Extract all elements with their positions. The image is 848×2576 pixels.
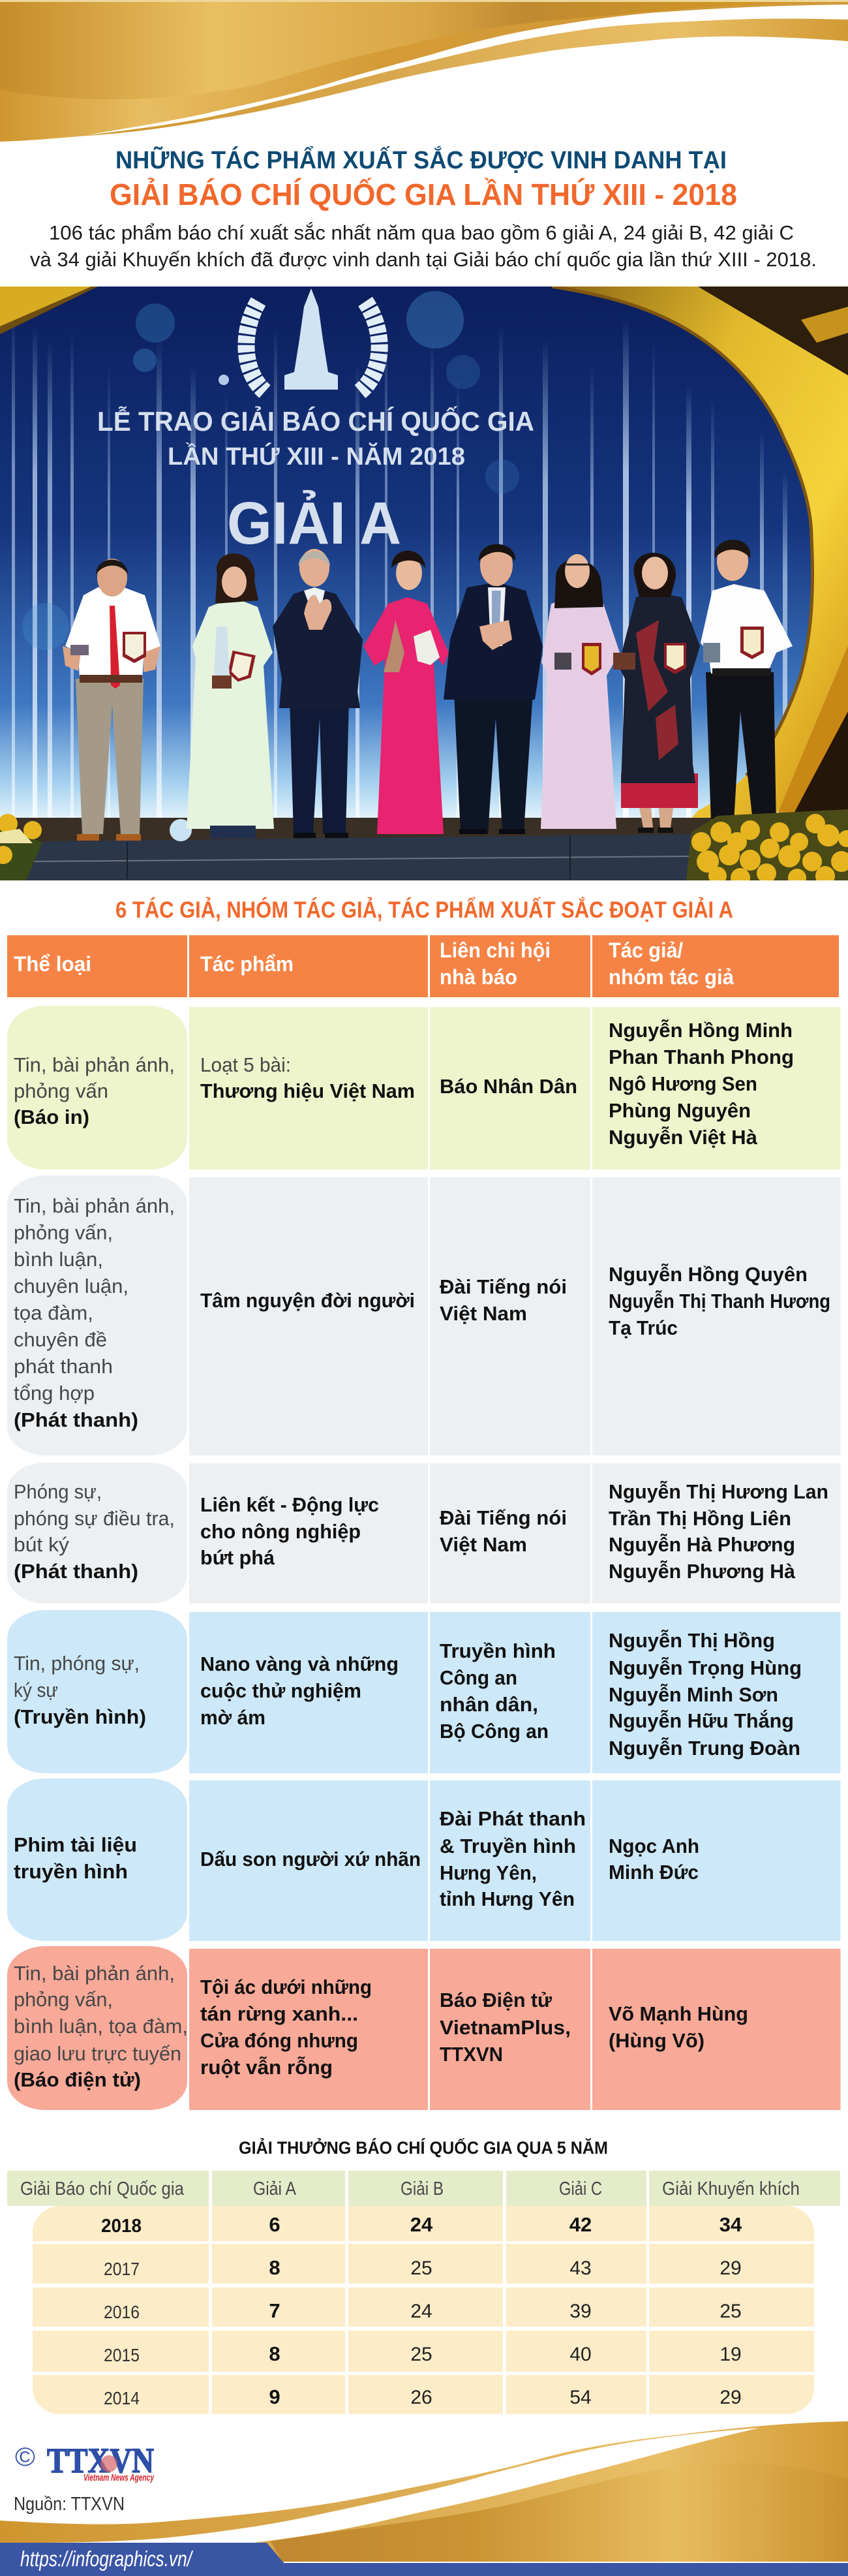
figure: woman in pale green ao dai — [187, 553, 274, 839]
authors: Nguyễn Hồng Quyên — [609, 1263, 808, 1286]
gold ring arch — [0, 287, 848, 842]
row 2017 — [104, 2256, 742, 2279]
authors: Ngô Hương Sen — [609, 1072, 757, 1095]
category pill: phát thanh — [14, 1355, 113, 1378]
figure: man in dark suit, clapping — [273, 549, 363, 838]
row 2016: 39 — [569, 2301, 592, 2322]
category pill: phỏng vấn, — [14, 1221, 113, 1244]
footer blue band with url: https://infographics.vn/ — [20, 2547, 193, 2571]
category pill: (Báo in) — [14, 1106, 89, 1128]
work: Thương hiệu Việt Nam — [200, 1079, 415, 1102]
association: tỉnh Hưng Yên — [440, 1887, 575, 1910]
authors — [592, 1007, 840, 1170]
table header: nhà báo — [440, 965, 517, 989]
work: cuộc thử nghiệm — [200, 1679, 361, 1702]
stats table header: Giải C — [559, 2179, 602, 2199]
work: Tâm nguyện đời người — [200, 1289, 415, 1312]
category pill: (Truyền hình) — [14, 1705, 146, 1728]
panel: row 6 báo điện tử — [7, 1946, 840, 2110]
association: Hưng Yên, — [440, 1861, 537, 1884]
work: Loạt 5 bài: — [200, 1053, 291, 1076]
stage backdrop text: LẦN THỨ XIII - NĂM 2018 — [168, 442, 465, 471]
row 2017: 2017 — [104, 2259, 140, 2279]
table header: Tác giả/ — [609, 939, 683, 962]
category pill: phỏng vấn, — [14, 1988, 113, 2011]
association: VietnamPlus, — [440, 2016, 571, 2039]
authors: Nguyễn Trung Đoàn — [609, 1737, 800, 1760]
work: Dấu son người xứ nhãn — [200, 1848, 421, 1870]
category pill: chuyên luận, — [14, 1275, 129, 1297]
row 2017: 8 — [269, 2256, 280, 2279]
work: Cửa đóng nhưng — [200, 2029, 358, 2052]
row 2015: 8 — [269, 2342, 280, 2365]
row 2014 — [104, 2385, 742, 2408]
category pill: (Phát thanh) — [14, 1560, 138, 1583]
authors: Nguyễn Trọng Hùng — [609, 1656, 802, 1679]
row 2016: 25 — [719, 2301, 742, 2322]
header gold swoosh — [0, 0, 848, 142]
stage backdrop text: GIẢI A — [227, 489, 401, 557]
row 2018: 24 — [410, 2213, 433, 2236]
row 2014: 2014 — [104, 2388, 140, 2408]
panel: row 2 phát thanh — [7, 1175, 840, 1455]
figure: woman in pink ao dai — [363, 551, 449, 834]
authors: Trần Thị Hồng Liên — [609, 1507, 791, 1530]
association — [430, 1463, 590, 1604]
row 2015: 40 — [569, 2344, 592, 2365]
category pill — [7, 1610, 187, 1773]
category pill: tổng hợp — [14, 1382, 95, 1404]
work — [189, 1612, 428, 1773]
figure: woman in light pink ao dai — [541, 554, 620, 829]
title: NHỮNG TÁC PHẨM XUẤT SẮC ĐƯỢC VINH DANH TẠI — [115, 145, 727, 174]
work: ruột vẫn rỗng — [200, 2056, 333, 2079]
table header: Tác phẩm — [200, 952, 294, 976]
row 2016: 7 — [269, 2299, 280, 2322]
work: tán rừng xanh... — [200, 2002, 358, 2025]
work: bứt phá — [200, 1546, 275, 1569]
stage backdrop text — [97, 405, 534, 557]
association — [430, 1612, 590, 1773]
association: Việt Nam — [440, 1533, 527, 1556]
work — [189, 1463, 428, 1604]
authors: Phan Thanh Phong — [609, 1046, 794, 1068]
stats row bands — [33, 2206, 814, 2415]
category pill: Phóng sự, — [14, 1480, 102, 1503]
category pill — [7, 1778, 187, 1941]
figure: young man in white shirt — [701, 540, 793, 828]
association: Đài Tiếng nói — [440, 1275, 567, 1298]
authors: Nguyễn Việt Hà — [609, 1126, 758, 1149]
source: Nguồn: TTXVN — [14, 2494, 125, 2515]
association: Truyền hình — [440, 1639, 556, 1662]
association: & Truyền hình — [440, 1835, 576, 1857]
authors — [592, 1780, 840, 1941]
association — [430, 1177, 590, 1455]
category pill: bình luận, — [14, 1248, 103, 1271]
association: Đài Phát thanh — [440, 1807, 586, 1830]
work — [189, 1007, 428, 1170]
row 2018 — [101, 2213, 742, 2237]
stats heading: GIẢI THƯỞNG BÁO CHÍ QUỐC GIA QUA 5 NĂM — [239, 2137, 608, 2158]
category pill: Tin, bài phản ánh, — [14, 1194, 175, 1217]
row 2014: 29 — [719, 2387, 742, 2408]
stats table header: Giải Báo chí Quốc gia — [20, 2179, 185, 2199]
association: Báo Nhân Dân — [440, 1075, 577, 1098]
row 2015: 19 — [719, 2344, 742, 2365]
work — [189, 1949, 428, 2110]
category pill: Phim tài liệu — [14, 1833, 137, 1856]
flowers — [0, 809, 848, 888]
category pill: giao lưu trực tuyến — [14, 2042, 181, 2065]
category pill: chuyên đề — [14, 1328, 107, 1351]
stats table header: Giải Khuyến khích — [662, 2179, 800, 2199]
authors: Ngọc Anh — [609, 1835, 699, 1857]
row 2018: 42 — [569, 2213, 592, 2236]
title — [110, 145, 737, 211]
row 2016: 2016 — [104, 2302, 140, 2322]
footer logo: TTXVN: Vietnam News Agency — [83, 2472, 154, 2483]
stage floor — [16, 818, 711, 880]
row 2017: 43 — [569, 2258, 592, 2279]
category pill: ký sự — [14, 1679, 58, 1701]
row 2018: 2018 — [101, 2216, 142, 2237]
association: Việt Nam — [440, 1302, 527, 1325]
category pill: Tin, bài phản ánh, — [14, 1053, 175, 1076]
row 2017: 29 — [719, 2258, 742, 2279]
footer blue band with url — [0, 2543, 848, 2576]
figure: man in dark suit — [444, 544, 543, 834]
authors: Võ Mạnh Hùng — [609, 2002, 748, 2025]
panel: row 5 phim tài liệu — [7, 1778, 840, 1941]
work: Nano vàng và những — [200, 1653, 399, 1675]
photo: award ceremony stage — [0, 287, 848, 888]
category pill — [7, 1946, 188, 2110]
category pill: Tin, bài phản ánh, — [14, 1962, 175, 1985]
work: Liên kết - Động lực — [200, 1493, 379, 1516]
stats table header: Giải A — [253, 2179, 297, 2199]
authors: Minh Đức — [609, 1861, 699, 1884]
association: TTXVN — [440, 2043, 503, 2066]
table header — [7, 935, 839, 997]
row 2016 — [104, 2299, 742, 2322]
figure: woman in black and red ao dai — [613, 553, 700, 833]
association — [430, 1007, 590, 1170]
category pill: tọa đàm, — [14, 1301, 93, 1324]
authors: Nguyễn Hữu Thắng — [609, 1709, 794, 1732]
intro text: 106 tác phẩm báo chí xuất sắc nhất năm qua bao gồm 6 giải A, 24 giải B, 42 giải C — [49, 221, 794, 244]
work: mờ ám — [200, 1706, 265, 1729]
table header: Thể loại — [14, 952, 91, 976]
authors: Tạ Trúc — [609, 1316, 678, 1339]
association: Công an — [440, 1666, 517, 1689]
title: GIẢI BÁO CHÍ QUỐC GIA LẦN THỨ XIII - 2018 — [110, 178, 737, 211]
panel: row 1 báo in — [7, 1006, 840, 1170]
category pill — [7, 1463, 187, 1604]
footer logo: TTXVN: TTXVN — [47, 2441, 154, 2480]
stats table — [7, 2171, 840, 2415]
row 2015: 25 — [410, 2344, 432, 2365]
row 2014: 54 — [569, 2387, 592, 2408]
category pill: truyền hình — [14, 1860, 128, 1883]
category pill — [7, 1175, 187, 1455]
authors — [592, 1612, 840, 1773]
panel: row 3 phát thanh phóng sự — [7, 1463, 840, 1604]
association: Báo Điện tử — [440, 1989, 553, 2011]
row 2018: 34 — [719, 2213, 742, 2236]
association: Bộ Công an — [440, 1720, 549, 1743]
figure: man in red tie — [63, 559, 160, 841]
authors: Nguyễn Hồng Minh — [609, 1019, 793, 1042]
category pill: bút ký — [14, 1533, 70, 1556]
stats table header: Giải B — [401, 2179, 444, 2199]
category pill: Tin, phóng sự, — [14, 1652, 140, 1675]
row 2017: 25 — [410, 2258, 432, 2279]
association: Đài Tiếng nói — [440, 1506, 567, 1529]
authors: Nguyễn Phương Hà — [609, 1560, 796, 1583]
authors: Nguyễn Hà Phương — [609, 1533, 795, 1556]
intro text: và 34 giải Khuyến khích đã được vinh danh tại Giải báo chí quốc gia lần thứ XIII - 2018. — [30, 248, 817, 271]
authors: (Hùng Võ) — [609, 2029, 704, 2052]
work: Tội ác dưới những — [200, 1976, 372, 1998]
footer logo: TTXVN — [15, 2441, 154, 2483]
icon: wreath and tower — [246, 288, 380, 392]
work: cho nông nghiệp — [200, 1520, 361, 1543]
authors — [592, 1949, 840, 2110]
association — [430, 1780, 590, 1941]
intro text — [30, 221, 817, 271]
category pill: bình luận, tọa đàm, — [14, 2015, 188, 2038]
authors: Nguyễn Minh Sơn — [609, 1683, 778, 1706]
stage backdrop text: LỄ TRAO GIẢI BÁO CHÍ QUỐC GIA — [97, 405, 534, 437]
authors: Nguyễn Thị Hồng — [609, 1629, 775, 1652]
stats table header — [7, 2171, 840, 2206]
footer gold swoosh — [0, 2421, 848, 2565]
category pill: phóng sự điều tra, — [14, 1507, 175, 1530]
section heading: 6 TÁC GIẢ, NHÓM TÁC GIẢ, TÁC PHẨM XUẤT SẮC ĐOẠT GIẢI A — [115, 897, 733, 923]
association: nhân dân, — [440, 1693, 538, 1716]
authors — [592, 1177, 840, 1455]
row 2018: 6 — [269, 2213, 280, 2236]
row 2016: 24 — [410, 2301, 432, 2322]
category pill: phỏng vấn — [14, 1079, 108, 1102]
authors: Nguyễn Thị Hương Lan — [609, 1480, 828, 1503]
authors — [592, 1463, 840, 1604]
row 2015 — [104, 2342, 742, 2365]
work — [189, 1780, 428, 1941]
category pill — [7, 1006, 187, 1170]
category pill: (Phát thanh) — [14, 1408, 138, 1431]
work — [189, 1177, 428, 1455]
panel: row 4 truyền hình — [7, 1610, 840, 1773]
association — [430, 1949, 590, 2110]
row 2014: 26 — [410, 2387, 432, 2408]
row 2015: 2015 — [104, 2345, 140, 2365]
category pill: (Báo điện tử) — [14, 2068, 141, 2091]
authors: Phùng Nguyên — [609, 1099, 751, 1122]
table header: Liên chi hội — [440, 939, 551, 962]
footer logo: TTXVN: © — [15, 2443, 35, 2472]
table header: nhóm tác giả — [609, 965, 734, 989]
row 2014: 9 — [269, 2385, 280, 2408]
